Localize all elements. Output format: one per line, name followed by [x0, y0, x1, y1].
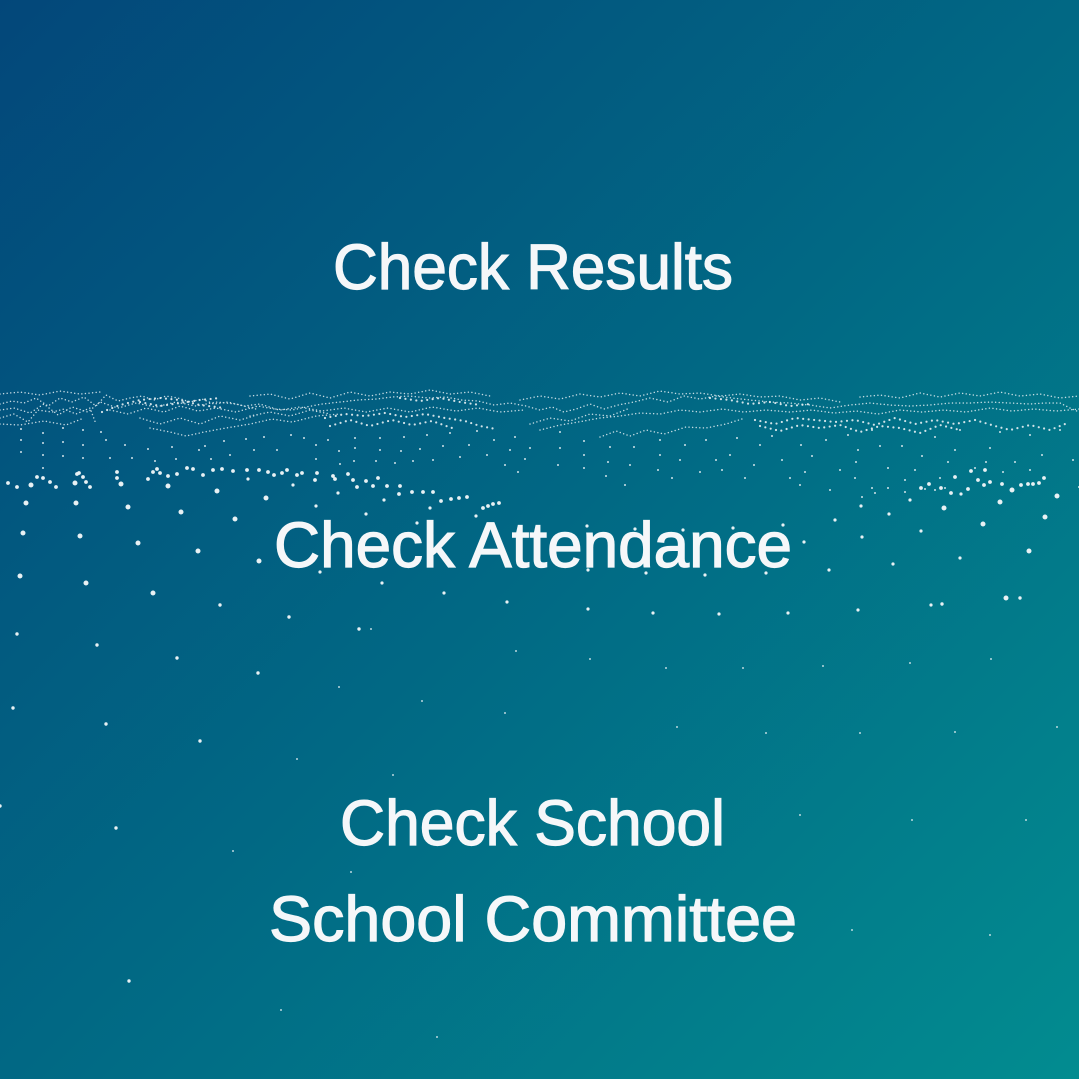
far dot band: back rows — [0, 390, 1079, 437]
dotted wave landscape — [0, 390, 1079, 1037]
near wave crest dots — [8, 468, 1044, 508]
middle grid small dots — [21, 428, 1079, 497]
far dot band: brighter mid rows — [102, 398, 1065, 433]
distant scattered dots — [0, 598, 1020, 981]
label: Check Results: Check Results — [333, 231, 733, 303]
label: Check Attendance: Check Attendance — [274, 509, 792, 581]
foreground large dots — [20, 483, 1057, 598]
label: Check School School Committee: Check School — [340, 787, 725, 859]
mid-ground dots — [248, 479, 961, 614]
label: Check School School Committee — [269, 787, 797, 955]
label: Check School School Committee: School Committee — [269, 883, 797, 955]
faintest dots — [233, 629, 1057, 1037]
